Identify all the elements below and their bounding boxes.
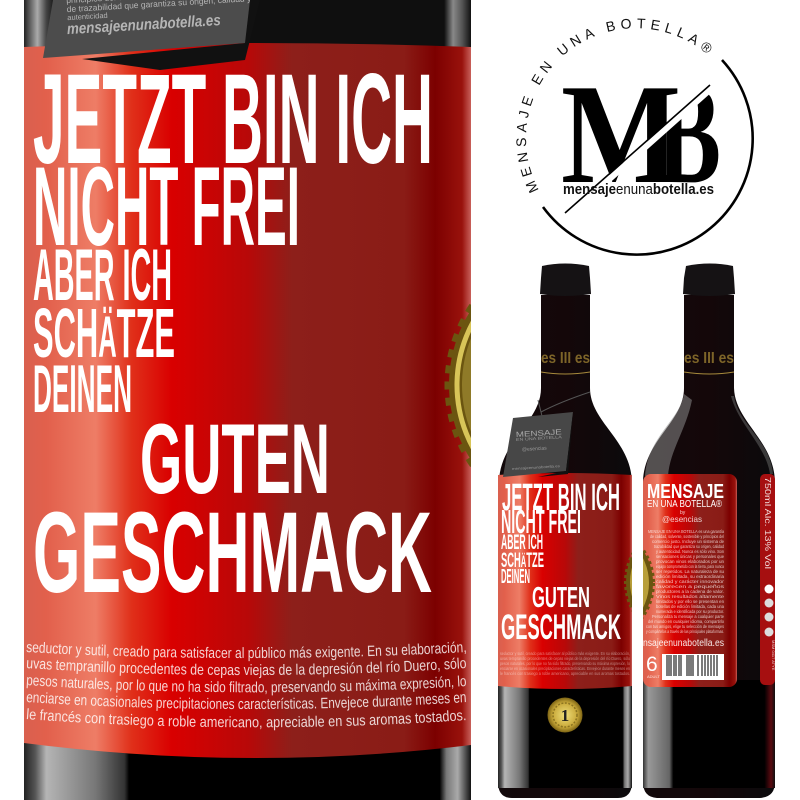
back label description: limitados y por ello se presentan en — [656, 599, 725, 604]
back label description: y autenticidad. Nunca es sólo vino. Son — [656, 549, 724, 554]
hanging tag: MENSAJE — [516, 427, 562, 439]
red label — [498, 473, 632, 689]
back label description: productores a la cadena de valor. — [656, 589, 724, 594]
front label headline: NICHT FREI — [501, 503, 581, 540]
hanging tag, large — [43, 0, 260, 70]
headline, large label — [33, 48, 433, 617]
capsule band text — [541, 350, 590, 374]
front label headline: GUTEN — [532, 582, 590, 614]
back label title: EN UNA BOTELLA® — [647, 499, 723, 510]
large red label — [24, 43, 471, 758]
back label — [643, 474, 737, 687]
back label description: edición limitada, su extraordinaria — [656, 574, 725, 579]
back label description: de calidad, solvente, sostenible y principios del — [650, 534, 724, 539]
front label description: enciarse en ocasionales precipitaciones características. Envejece durante meses en — [500, 666, 630, 671]
age mark: ADULT — [647, 674, 660, 679]
headline, large label: DEINEN — [33, 351, 132, 427]
front label headline: SCHÄTZE — [501, 549, 544, 572]
back label description: MENSAJE EN UNA BOTELLA es una garantía — [648, 529, 724, 534]
description text, large label: seductor y sutil, creado para satisfacer al público más exigente. En su elaboración, — [26, 642, 466, 662]
small bottle, back — [643, 264, 775, 798]
hanging tag: mensajeenunabotella.es — [512, 464, 560, 471]
back label description: calidad y carácter innovador — [656, 579, 725, 584]
front label description: le francés con trasiego a roble americano, apreciable en sus aromas tostados. — [500, 671, 630, 676]
gold seal seen through glass — [444, 304, 471, 467]
back label description: ser repetidos. La naturaleza de su — [656, 569, 725, 574]
back label title: by — [680, 510, 686, 516]
hanging tag — [503, 412, 573, 477]
back label description: comercio justo. Incluye un sistema de — [652, 539, 725, 544]
age mark: 6 — [646, 653, 658, 676]
back label title: @esencias — [662, 514, 702, 524]
monogram MB: B — [657, 55, 721, 213]
hanging tag, large: autenticidad — [67, 11, 108, 22]
side label: 750ml Alc. 13% Vol — [763, 477, 772, 569]
back label description: Personaliza tu mensaje a cualquier parte — [652, 614, 724, 619]
capsule band text: es III es — [541, 350, 590, 367]
seal edge — [624, 552, 632, 612]
capsule band text — [684, 350, 734, 374]
capsule band text: es III es — [684, 350, 734, 367]
back label description: equipo comprometido con la tierra, para nunca — [656, 564, 724, 569]
logo: Mensaje en una Botella — [516, 18, 754, 256]
side label: MSM 0417 ATYE — [771, 640, 776, 671]
medal: 1 — [561, 706, 569, 725]
large bottle close-up — [24, 0, 471, 800]
circular wordmark — [526, 28, 708, 190]
back label description: y compártelos a través de las principales plataformas. — [646, 629, 724, 634]
hanging tag: @esencias — [522, 446, 547, 453]
back label description: trazabilidad que garantiza su origen, calidad — [654, 544, 724, 549]
front label headline: GESCHMACK — [501, 608, 621, 647]
front label description: seductor y sutil, creado para satisfacer al público más exigente. En su elaboración, — [500, 651, 630, 656]
bottle body — [498, 295, 632, 798]
medal — [548, 698, 582, 732]
description text, large label: pesos naturales, por lo que no ha sido filtrado, preservando su máxima expresión, lo — [26, 676, 466, 696]
barcode — [662, 654, 724, 680]
tag string — [538, 392, 590, 420]
front label headline — [501, 477, 621, 647]
back label description: con tus amigos, elige tu selección de mensajes — [646, 624, 725, 629]
logo: Mensaje en una Botella: MENSAJE EN UNA BOTELLA® — [516, 18, 712, 194]
capsule — [683, 264, 735, 296]
front label description — [500, 651, 630, 676]
back label description: botellas de edición limitada, cada una — [656, 604, 725, 609]
back label description: Vinos resultados altamente — [656, 594, 725, 599]
description text, large label: uvas tempranillo procedentes de cepas viejas de la depresión del río Duero, sólo — [26, 658, 466, 678]
capsule — [540, 264, 591, 296]
back label description: favorecen a pequeños — [656, 584, 725, 589]
hanging tag: EN UNA BOTELLA — [516, 434, 562, 442]
headline, large label: NICHT FREI — [33, 144, 300, 269]
back label description — [646, 529, 725, 634]
seal edge — [643, 547, 655, 619]
small bottle, front — [498, 264, 632, 798]
description text, large label — [26, 642, 466, 730]
back label title: MENSAJE — [647, 481, 724, 503]
logo url: mensajeenunabotella.es — [563, 181, 714, 198]
hanging tag, large: mensajeenunabotella.es — [66, 12, 222, 38]
bottle body — [643, 295, 775, 798]
side label — [760, 474, 776, 685]
front label headline: ABER ICH — [501, 531, 543, 554]
circular arc — [543, 60, 753, 255]
headline, large label: SCHÄTZE — [33, 294, 175, 372]
back label description: sensaciones únicas y personales que — [656, 554, 725, 559]
monogram MB: M — [561, 55, 681, 213]
front label description: uvas tempranillo procedentes de cepas viejas de la depresión del río Duero, sólo — [500, 656, 630, 661]
front label headline: DEINEN — [501, 566, 530, 588]
back label url: nsajeenunabotella.es — [643, 638, 724, 649]
description text, large label: enciarse en ocasionales precipitaciones características. Envejece durante meses en — [26, 692, 466, 712]
back label description: del mundo en cualquier idioma, compartirlo — [648, 619, 724, 624]
headline, large label: GESCHMACK — [33, 489, 432, 617]
back label title — [647, 481, 724, 524]
back label description: provocan vinos elaborados por un — [656, 559, 725, 564]
small bottle, front: JETZT BIN ICH — [502, 477, 620, 519]
description text, large label: le francés con trasiego a roble americano, apreciable en sus aromas tostados. — [26, 708, 466, 730]
front label description: pesos naturales, por lo que no ha sido filtrado, preservando su máxima expresión, lo — [500, 661, 630, 666]
headline, large label: ABER ICH — [33, 235, 172, 316]
headline, large label: GUTEN — [140, 403, 330, 514]
back label description: numerada e identificada por su productor. — [656, 609, 724, 614]
